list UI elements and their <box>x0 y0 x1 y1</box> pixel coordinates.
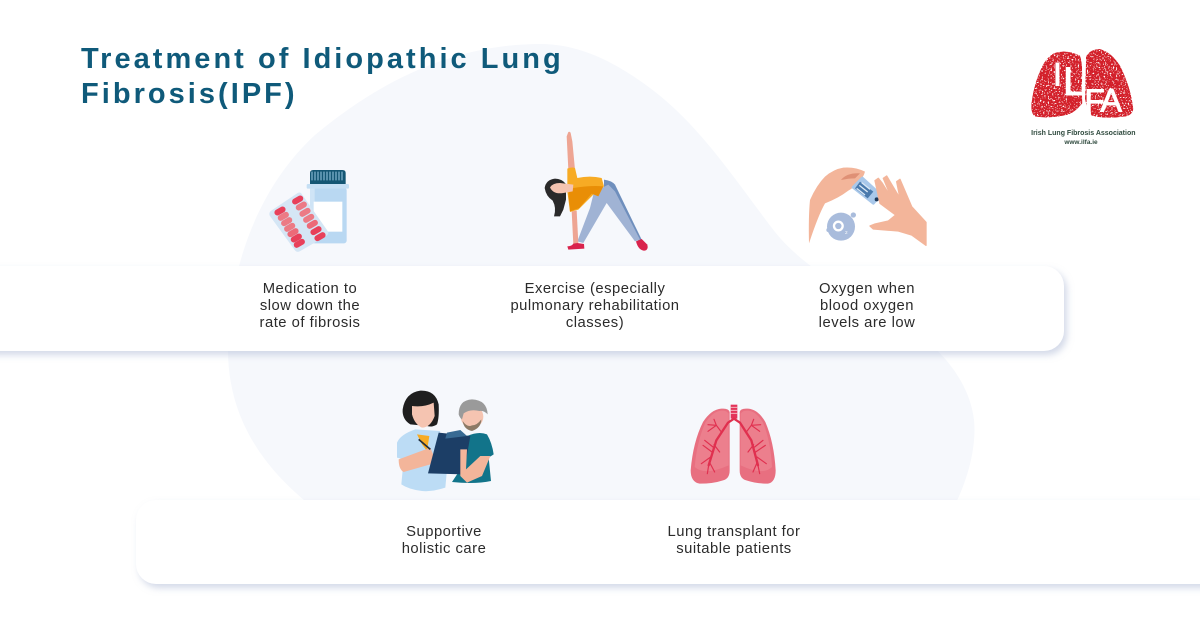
logo: Irish Lung Fibrosis Association: A <box>1100 82 1122 118</box>
logo: Irish Lung Fibrosis Association: Irish Lung Fibrosis Association <box>1031 130 1136 137</box>
icon: exercise figure <box>544 132 648 251</box>
caption: exercise: pulmonary rehabilitation <box>510 298 680 314</box>
icon: lungs <box>690 404 776 484</box>
icon: medication <box>269 170 349 252</box>
logo: Irish Lung Fibrosis Association: I <box>1053 57 1062 93</box>
title <box>81 43 564 110</box>
title: Treatment of Idiopathic Lung <box>81 43 564 75</box>
caption: lung transplant: suitable patients <box>676 541 792 557</box>
caption: medication: Medication to <box>263 281 357 297</box>
caption: supportive care: holistic care <box>402 541 486 557</box>
caption: medication: slow down the <box>260 298 360 314</box>
caption: oxygen: Oxygen when <box>819 281 915 297</box>
icon: pulse oximeter and hands: 2 <box>845 230 848 235</box>
caption: oxygen: levels are low <box>819 315 915 331</box>
caption: medication: rate of fibrosis <box>260 315 360 331</box>
title: Fibrosis(IPF) <box>81 78 298 110</box>
caption: lung transplant <box>668 524 800 557</box>
logo: Irish Lung Fibrosis Association: www.ilfa.ie <box>1063 139 1098 146</box>
caption: supportive care: Supportive <box>406 524 482 540</box>
caption: exercise: classes) <box>566 315 624 331</box>
logo: Irish Lung Fibrosis Association <box>1031 49 1136 146</box>
caption: exercise <box>510 281 680 331</box>
caption: medication <box>260 281 360 331</box>
logo: Irish Lung Fibrosis Association: L <box>1063 60 1085 104</box>
caption: oxygen <box>819 281 915 331</box>
caption: supportive care <box>402 524 486 557</box>
caption: exercise: Exercise (especially <box>525 281 665 297</box>
panel: top treatment card <box>0 266 1064 351</box>
logo: Irish Lung Fibrosis Association: F <box>1084 83 1105 120</box>
panel: bottom treatment card <box>136 500 1200 584</box>
caption: lung transplant: Lung transplant for <box>668 524 800 540</box>
caption: oxygen: blood oxygen <box>820 298 914 314</box>
icon: pulse oximeter and hands <box>808 168 927 246</box>
icon: doctor and patient <box>397 390 494 492</box>
